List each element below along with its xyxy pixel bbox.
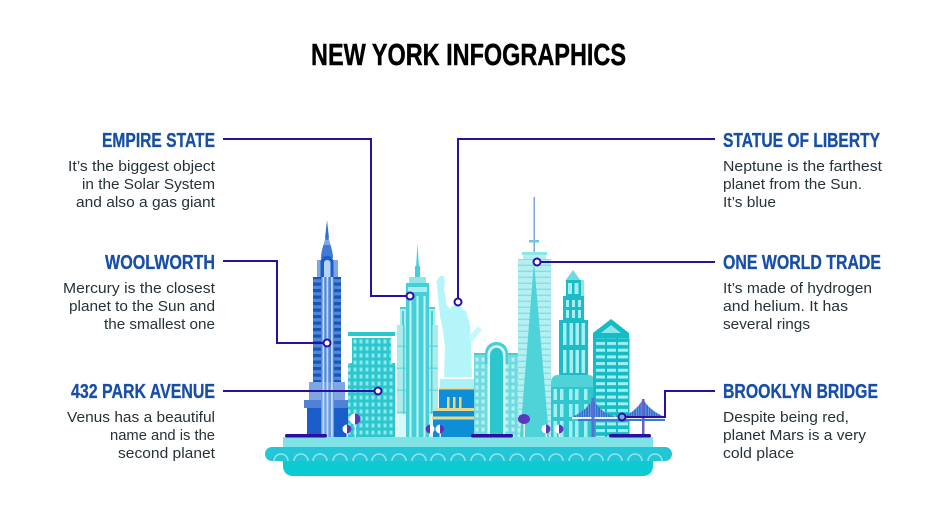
connector: One World Trade xyxy=(534,258,715,266)
building: Empire State xyxy=(397,243,438,437)
text block: One World Trade: It’s made of hydrogen xyxy=(723,281,872,297)
building: Statue of Liberty xyxy=(432,276,482,437)
connector: 432 Park Avenue xyxy=(223,388,382,394)
connector: Woolworth xyxy=(223,261,330,346)
connector: Statue of Liberty xyxy=(454,139,715,306)
text block: Brooklyn Bridge: Despite being red, xyxy=(723,410,849,426)
text block: Empire State: in the Solar System xyxy=(82,177,215,193)
text block: Woolworth: Mercury is the closest xyxy=(63,281,215,297)
text block: Empire State xyxy=(68,129,215,211)
text block: Statue of Liberty: Neptune is the farthest xyxy=(723,159,882,175)
trees xyxy=(342,414,564,437)
text block: Brooklyn Bridge: planet Mars is a very xyxy=(723,428,867,444)
text block: 432 Park Avenue: 432 PARK AVENUE xyxy=(71,380,215,403)
text block: Woolworth xyxy=(63,251,215,333)
building: Woolworth tower xyxy=(304,220,348,437)
building: gothic tower xyxy=(551,270,595,437)
text block: Brooklyn Bridge xyxy=(723,380,878,462)
text block: One World Trade: ONE WORLD TRADE xyxy=(723,251,881,274)
text block: Brooklyn Bridge: cold place xyxy=(723,446,794,462)
text block: Empire State: It’s the biggest object xyxy=(68,159,215,175)
connector: Empire State xyxy=(223,139,414,300)
illustration: New York skyline xyxy=(265,197,672,476)
text block: One World Trade: and helium. It has xyxy=(723,299,848,315)
text block: 432 Park Avenue xyxy=(67,380,215,462)
island platform xyxy=(265,434,672,476)
connector: Brooklyn Bridge xyxy=(618,391,715,420)
text block: Empire State: EMPIRE STATE xyxy=(102,129,215,152)
text block: One World Trade: several rings xyxy=(723,317,810,333)
building: One World Trade xyxy=(518,197,551,437)
text block: Statue of Liberty xyxy=(723,129,882,211)
Brooklyn Bridge xyxy=(572,398,665,437)
text block: Woolworth: the smallest one xyxy=(104,317,215,333)
text block: 432 Park Avenue: Venus has a beautiful xyxy=(67,410,215,426)
title: NEW YORK INFOGRAPHICS xyxy=(311,38,626,72)
text block: 432 Park Avenue: second planet xyxy=(118,446,215,462)
building: 432 Park Avenue xyxy=(348,332,395,437)
text block: One World Trade xyxy=(723,251,881,333)
text block: Statue of Liberty: planet from the Sun. xyxy=(723,177,862,193)
building: striped tower xyxy=(593,319,630,437)
text block: Woolworth: planet to the Sun and xyxy=(69,299,215,315)
text block: Woolworth: WOOLWORTH xyxy=(105,251,215,274)
text block: Brooklyn Bridge: BROOKLYN BRIDGE xyxy=(723,380,878,403)
text block: Statue of Liberty: STATUE OF LIBERTY xyxy=(723,129,880,152)
text block: Statue of Liberty: It’s blue xyxy=(723,195,776,211)
text block: Empire State: and also a gas giant xyxy=(76,195,215,211)
building: arched tower xyxy=(474,342,519,437)
text block: 432 Park Avenue: name and is the xyxy=(110,428,215,444)
